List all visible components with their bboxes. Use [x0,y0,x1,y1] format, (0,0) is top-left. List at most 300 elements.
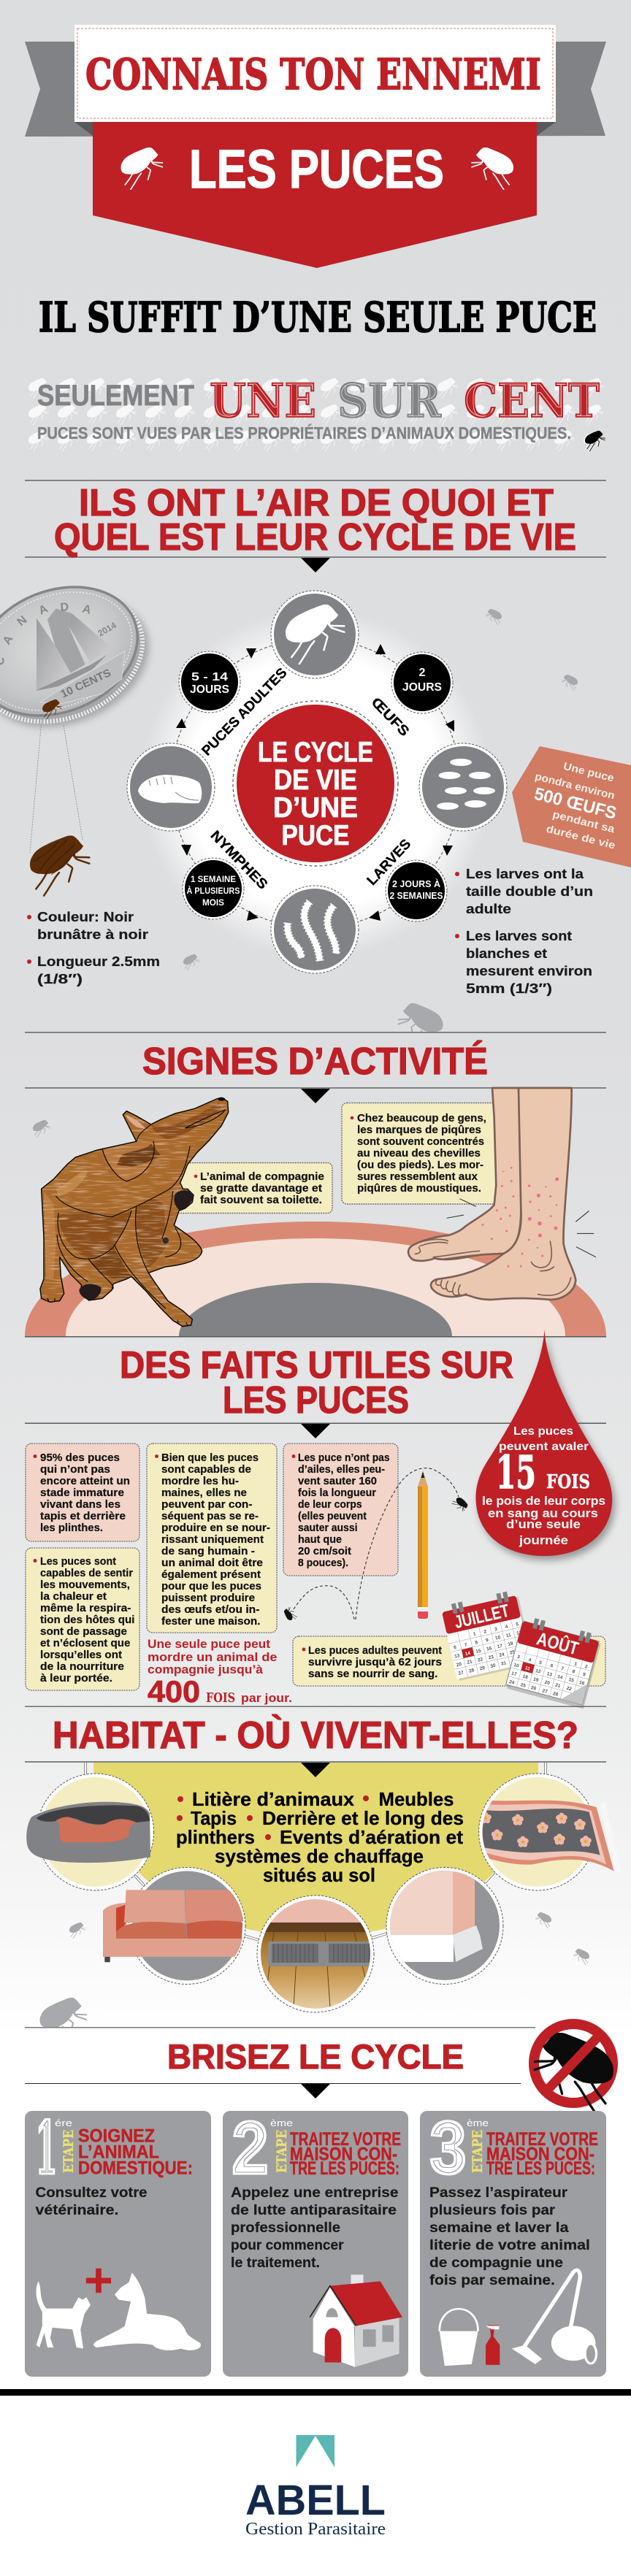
label: nymphes: NYMPHES [207,828,270,893]
habitat list: Litière d’animaux [192,1788,355,1810]
coin lettering [0,601,118,701]
step 1 text [35,2185,148,2218]
label: larves: LARVES [364,837,414,889]
legs with bite marks [408,1088,596,1300]
right bullets: larvae facts: mesurent environ [466,964,592,978]
heading line 2: QUEL EST LEUR CYCLE DE VIE [54,516,576,559]
fact: human blood: mordre les hu- [161,1475,239,1487]
label: oeufs: ŒUFS [368,695,412,740]
coin lettering: A [1,633,16,647]
oval: floor vent [256,1895,376,2012]
right bullets: larvae facts: 5mm (1/3″) [466,981,552,996]
400 bites stat: par jour. [241,1691,292,1705]
fact: sensing hosts: lorsqu’elles ont [40,1649,122,1661]
time: 5-14 jours: JOURS [190,683,229,696]
calendar: aout: 1 [573,1661,578,1667]
section heading: signes: SIGNES D’ACTIVITÉ [142,1040,488,1083]
section heading: signes [25,1032,606,1103]
habitat list: Tapis [191,1807,237,1829]
calendar: aout [505,1615,603,1709]
calendar: juillet: 2 [483,1629,487,1635]
number 3: 3 [429,2106,467,2190]
coin lettering: 2014 [96,620,118,639]
400 bites stat [148,1637,292,1709]
oval: baseboard [386,1868,504,1985]
fact: survival: survivre jusqu’à 62 jours [308,1656,442,1668]
habitat connecting lines [85,1763,546,1940]
fact: human blood: peuvent par con- [161,1498,253,1511]
callout: bite marks: au niveau des chevilles [357,1147,481,1159]
logo mark [297,2435,334,2467]
step 2 text: Appelez une entreprise [231,2185,399,2201]
fact: sensing hosts: et n’éclosent que [40,1637,130,1649]
step 3 text: fois par semaine. [429,2273,555,2288]
calendar: juillet: 13 [454,1653,461,1660]
blood drop stat: en sang au cours [488,1506,598,1520]
calendar: juillet: 19 [518,1638,524,1645]
section heading: brisez: BRISEZ LE CYCLE [167,2037,464,2076]
step 2 heading: MAISON CON- [290,2144,397,2164]
calendar: aout: 19 [532,1677,539,1683]
panel: step 1: ETAPE [61,2130,77,2173]
step 3 text: plusieurs fois par [429,2203,556,2218]
habitat list: Derrière et le long des [262,1807,464,1829]
400 bites stat: Une seule puce peut [148,1637,270,1651]
icon: house [310,2274,402,2367]
calendar: aout: 4 [528,1657,532,1663]
stage: adult flea [271,591,359,678]
step 1 heading: SOIGNEZ [78,2126,155,2147]
habitat list: plinthers [176,1826,255,1848]
calendar: aout: 11 [524,1665,531,1672]
fact: jumping: haut que [298,1533,342,1546]
callout: bite marks: piqûres de moustiques. [357,1182,481,1195]
panel: step 1: ére [55,2117,72,2128]
measurement lines [30,719,83,853]
section heading: habitat: HABITAT - OÙ VIVENT-ELLES? [53,1714,578,1757]
step 3 text: semaine et laver la [429,2220,569,2236]
icon: background fleas [183,609,578,1048]
callout: pet scratches [175,1162,332,1214]
blood drop stat: Les puces [513,1425,573,1438]
salmon tag: 500 eggs: 500 ŒUFS [532,784,619,824]
calendar: juillet: 28 [469,1668,475,1674]
colour text: Couleur: Noir [37,910,134,924]
calendar: juillet: 7 [464,1642,468,1648]
calendar: aout: 7 [560,1666,565,1672]
step 2 heading: TRE LES PUCES: [290,2158,399,2179]
calendar: juillet [440,1589,534,1682]
calendar: aout: 24 [508,1679,515,1686]
section heading: brisez [25,2027,535,2098]
fact: immature fleas: les plinthes. [40,1522,103,1534]
header banner [25,25,606,268]
calendar: juillet: 9 [486,1638,489,1644]
calendar: aout: 3 [516,1655,521,1660]
grey ribbon [25,42,606,137]
fact: human blood: des œufs et/ou in- [161,1603,259,1616]
calendar: juillet: 22 [478,1657,483,1663]
right bullets: larvae facts [455,867,593,996]
panel: step 1 [25,2105,211,2377]
fact: immature fleas: vivant dans les [40,1498,121,1511]
calendar: juillet: 27 [458,1670,464,1676]
time: 2 jours [391,652,453,713]
time: 2 jours a 2 semaines [386,860,447,921]
step 3 text: Passez l’aspirateur [429,2185,568,2201]
calendar: juillet: 1 [473,1631,477,1637]
stage: larvae [271,886,359,973]
salmon tag: 500 eggs: pondra environ [534,771,616,802]
calendar: juillet: 17 [497,1644,503,1649]
fact: jumping: fois la longueur [298,1487,376,1499]
fact: jumping: de leur corps [298,1498,362,1511]
fact: jumping: 20 cm/soit [298,1545,351,1557]
callout: pet scratches: fait souvent sa toilette. [200,1194,322,1206]
fact: human blood: séquent pas se re- [161,1510,259,1522]
fact: sensing hosts: Les puces sont [40,1555,116,1568]
step 1 heading: DOMESTIQUE: [78,2158,193,2179]
fact: human blood: fester une maison. [161,1615,260,1628]
right bullets: larvae facts: blanches et [466,946,547,961]
arrow [301,2084,330,2098]
title: les puces: LES PUCES [189,139,444,199]
fact: human blood: puissent produire [161,1592,255,1604]
direction arrows [176,644,454,921]
flea description bullets: brunâtre à noir [37,927,148,942]
logo: abell [245,2435,386,2539]
icon: flea jump start [284,1607,297,1620]
calendar: aout: 2 [584,1664,589,1670]
arrow [301,1763,330,1777]
fact: immature fleas [26,1444,139,1541]
calendar: juillet: 23 [488,1655,494,1660]
section heading: des faits: LES PUCES [223,1379,409,1422]
icon: flea jump end [451,1495,469,1514]
time: 5-14 jours [179,651,240,713]
larvae colour: Les larves sont [466,929,572,943]
coin lettering: N [15,614,29,629]
time: 1 semaine [183,858,244,919]
calendar: juillet: 18 [508,1641,514,1647]
calendar: aout: 13 [546,1671,553,1678]
fact: human blood: de sang humain - [161,1545,255,1557]
step 2 text: le traitement. [231,2255,320,2271]
blood drop stat: journée [519,1533,568,1547]
fact: human blood [147,1444,277,1633]
coin lettering: A [37,602,50,618]
calendar: aout: 5 [538,1660,543,1666]
callout: bite marks [342,1103,506,1204]
icon: flea left [121,147,162,189]
calendar: juillet: 4 [505,1624,509,1630]
fact: sensing hosts: de la nourriture [40,1660,124,1673]
icon: cleaning tools [440,2270,597,2366]
time: 1 semaine: À PLUSIEURS [187,885,240,896]
fact: sensing hosts [26,1548,139,1690]
salmon tag: 500 eggs [512,746,631,867]
dog illustration [40,1097,229,1327]
fact: jumping [283,1444,398,1576]
sub line: PUCES SONT VUES PAR LES PROPRIÉTAIRES D’ANIMAUX DOMESTIQUES. [37,423,571,442]
calendar: aout: 8 [572,1669,575,1675]
fact: human blood: un animal doit être [161,1557,263,1569]
habitat list: situés au sol [263,1864,375,1886]
calendar: juillet: 8 [475,1640,478,1646]
calendar: aout: 28 [552,1691,559,1698]
number 2: 2 [232,2106,269,2190]
fact: jumping: (elles peuvent [298,1510,367,1522]
centre disc: PUCE [282,820,349,851]
fact: immature fleas: tapis et derrière [40,1510,126,1522]
400 bites stat: mordre un animal de [148,1650,277,1664]
length text: Longueur 2.5mm [37,954,160,969]
label: puces adultes: PUCES ADULTES [199,665,290,759]
icon: enlarged brown flea [30,835,89,896]
step 1 text: Consultez votre [35,2185,148,2201]
pencil [418,1471,428,1619]
number 400: 400 [148,1674,200,1709]
fact: survival [293,1636,605,1686]
calendar: juillet: 5 [516,1622,519,1628]
arrow [301,558,330,572]
calendar: juillet: 15 [475,1648,482,1655]
step 3 text: de compagnie une [429,2255,563,2271]
step 2 heading [290,2129,401,2179]
vent grille [268,1941,374,1966]
logo subtitle: Gestion Parasitaire [245,2520,386,2539]
calendar: juillet: 31 [500,1660,507,1667]
coin lettering: D [60,601,69,614]
icon: small black flea [585,431,605,451]
seulement: SEULEMENT [37,380,194,412]
callout: bite marks: sont souvent concentrés [357,1135,484,1148]
fact: sensing hosts: même la respira- [40,1602,131,1614]
fact: human blood: produire en se nour- [161,1522,270,1534]
fact: human blood: pour que les puces [161,1580,261,1592]
fact: sensing hosts: sont de passage [40,1625,127,1638]
callout: pet scratches: L’animal de compagnie [200,1170,324,1183]
fact: immature fleas: stade immature [40,1487,124,1499]
section heading: des faits [25,1344,606,1438]
step 1 heading: L’ANIMAL [78,2142,159,2163]
cent: CENT [464,374,600,429]
calendar: juillet: 30 [490,1663,497,1669]
calendar: juillet: 3 [494,1627,498,1632]
icon: flea right [472,147,513,189]
step 2 text: de lutte antiparasitaire [231,2203,397,2218]
fact: human blood: Bien que les puces [161,1452,259,1464]
stage: eggs [419,743,507,831]
sailboat [37,608,125,703]
fact: sensing hosts: la chaleur et [40,1590,107,1603]
callout: pet scratches: se gratte davantage et [200,1182,322,1195]
time: 1 semaine: MOIS [202,897,224,908]
red banner [93,122,537,268]
coin lettering: A [81,602,93,617]
icon: cat, dog and cross [36,2269,201,2350]
blood drop stat: peuvent avaler [499,1441,589,1453]
callout: bite marks: Chez beaucoup de gens, [357,1112,486,1124]
time: 2 jours: JOURS [402,681,442,694]
panel: step 3: ETAPE [470,2130,486,2173]
step 2 text: professionnelle [231,2220,340,2236]
habitat list: Meubles [378,1788,454,1810]
calendar: aout: 20 [544,1680,551,1686]
larvae size: Les larves ont la [466,867,584,881]
calendar: aout: 18 [522,1674,529,1680]
centre disc [233,701,398,866]
blood drop stat: d’une seule [506,1517,581,1531]
calendar: juillet: 29 [479,1665,486,1671]
calendar: juillet: 24 [499,1652,505,1658]
calendar: juillet: 12 [516,1630,523,1636]
fact: survival: sans se nourrir de sang. [308,1668,437,1680]
habitat list: Events d’aération et [280,1826,463,1848]
400 bites stat: compagnie jusqu’à [148,1663,264,1676]
panel: step 3 [420,2106,606,2377]
fact: jumping: Les puce n’ont pas [298,1452,390,1464]
sur: SUR [337,374,442,429]
blood drop stat: FOIS [546,1471,590,1493]
centre disc: LE CYCLE [258,737,373,768]
panel: step 1: 1 [35,2105,58,2191]
rainbow floor [25,1222,606,1338]
panel: step 3: ème [467,2117,489,2128]
calendar: aout: 17 [510,1671,518,1677]
fact: human blood: rissant uniquement [161,1533,264,1546]
calendar: juillet: 21 [467,1659,473,1665]
centre disc: D’UNE [273,792,358,824]
coin lettering: 10 CENTS [59,667,113,701]
step 3 heading [486,2129,598,2179]
step 3 heading: MAISON CON- [486,2144,594,2164]
one in a hundred statement [26,374,606,451]
logo name: ABELL [245,2477,386,2524]
fact: sensing hosts: tion des hôtes qui [40,1614,134,1626]
step 3 heading: TRAITEZ VOTRE [486,2129,598,2150]
une: UNE [210,374,316,429]
calendar: juillet: 6 [454,1645,457,1650]
step 1 text: vétérinaire. [35,2203,118,2218]
fact: sensing hosts: les mouvements, [40,1579,130,1591]
arrow [301,1424,330,1438]
panel: step 2 [223,2106,408,2377]
centre disc: DE VIE [274,764,357,796]
oval: pet bed [26,1774,154,1890]
habitat yellow panel [93,1763,538,1936]
calendar: juillet: JUILLET [453,1601,511,1633]
oval: carpet [479,1774,619,1890]
step 2 heading: TRAITEZ VOTRE [290,2129,401,2150]
jump trajectory [294,1468,459,1619]
calendar: aout: 14 [557,1674,563,1681]
flea description bullets [27,910,160,986]
salmon tag: 500 eggs: durée de vie [545,824,616,852]
number 15: 15 [496,1446,536,1499]
fact: jumping: 8 pouces). [298,1557,348,1569]
fact: immature fleas: qui n’ont pas [40,1463,110,1476]
time: 2 jours: 2 [419,667,426,679]
section heading: des faits: DES FAITS UTILES SUR [120,1344,513,1387]
calendar: juillet: 10 [494,1635,501,1641]
habitat list: systèmes de chauffage [215,1845,424,1867]
step 2 text: pour commencer [231,2238,344,2253]
400 bites stat: FOIS [206,1690,235,1706]
fact: survival: Les puces adultes peuvent [308,1644,442,1657]
calendar: juillet: 11 [505,1633,512,1638]
callout: bite marks: les marques de piqûres [357,1124,481,1136]
time: 1 semaine: 1 SEMAINE [191,874,236,884]
calendar: aout: 16 [578,1680,585,1687]
step 1 heading [78,2126,193,2179]
step 3 text [429,2185,590,2288]
fact: jumping: sauter aussi [298,1522,358,1534]
stage: pupa [127,743,215,831]
fact: immature fleas: 95% des puces [40,1452,120,1464]
arrow [301,1089,330,1103]
calendar: aout: 25 [520,1682,527,1689]
calendar: juillet: 16 [486,1646,492,1652]
time: 5-14 jours: 5 - 14 [191,671,228,683]
calendar: aout: 22 [566,1686,573,1692]
calendar: aout: 21 [554,1683,561,1689]
right bullets: larvae facts: taille double d’un [466,884,593,899]
calendar: juillet: 14 [464,1651,471,1657]
icon: no fleas sign [534,2024,613,2112]
calendar: juillet: 20 [456,1662,462,1668]
coin [0,564,169,751]
calendar: aout: 27 [542,1688,548,1695]
panel: step 2: ETAPE [274,2130,290,2173]
fact: jumping: d’ailes, elles peu- [298,1463,385,1476]
white title box [74,25,556,122]
section heading: cycle [25,480,606,572]
callout: bite marks: sures ressemblent aux [357,1170,478,1183]
right bullets: larvae facts: adulte [466,902,511,916]
calendar: aout: 15 [568,1677,575,1684]
icon: habitat background fleas [39,1912,589,2044]
oval: sofa [103,1868,245,1985]
icon: small flea [33,1120,50,1138]
fact: immature fleas: encore atteint un [40,1475,130,1487]
calendar: aout: AOÛT [535,1627,581,1659]
fact: human blood: sont capables de [161,1463,251,1476]
footer bar [0,2389,631,2396]
time: 2 jours a 2 semaines: 2 SEMAINES [390,890,443,901]
step 3 text: literie de votre animal [429,2238,590,2253]
fact: sensing hosts: capables de sentir [40,1567,133,1579]
fact: human blood: également présent [161,1568,261,1581]
life cycle diagram [127,591,507,973]
blood drop stat: le pois de leur corps [482,1494,605,1508]
flea description bullets: (1/8″) [37,972,83,986]
callout: bite marks: (ou des pieds). Les mor- [357,1159,483,1171]
calendar: aout: 26 [530,1685,537,1692]
fact: human blood: maines, elles ne [161,1487,247,1499]
calendar: aout: 9 [582,1672,586,1678]
heading line 1: ILS ONT L’AIR DE QUOI ET [79,482,554,524]
calendar: aout: 10 [513,1663,520,1669]
fact: jumping: vent sauter 160 [298,1475,377,1487]
calendar: aout: 6 [550,1663,554,1669]
salmon tag: 500 eggs: Une puce [562,761,615,784]
fact: sensing hosts: à leur portée. [40,1672,112,1684]
panel: step 2: ème [270,2117,293,2128]
calendar: juillet: 25 [509,1649,516,1656]
blood drop stat [476,1330,615,1560]
step 2 text [231,2185,399,2271]
